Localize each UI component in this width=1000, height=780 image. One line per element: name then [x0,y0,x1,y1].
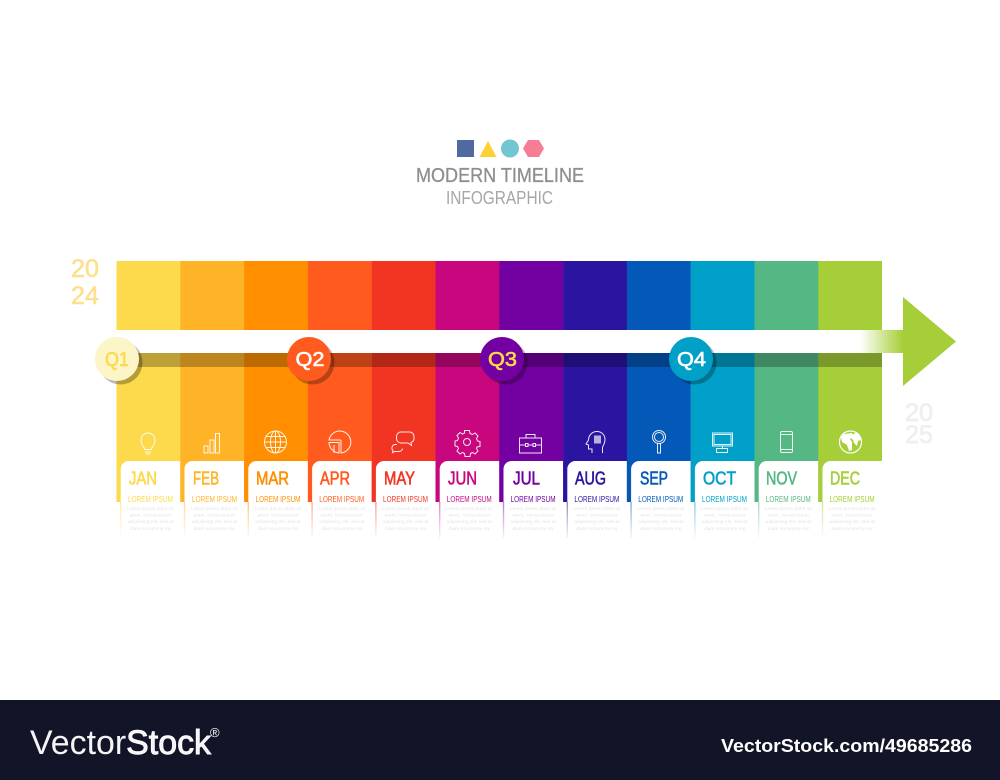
body text: Lorem ipsum dolor sit [701,506,749,512]
body text: adipiscing elit, sed at [128,519,174,525]
body text: Lorem ipsum dolor sit [574,506,621,512]
month: OCT: OCT [703,468,736,488]
body text: Lorem ipsum dolor sit [318,506,366,512]
body text: diam nonummy my [704,526,746,532]
label: lorem ipsum: LOREM IPSUM [256,495,300,504]
month: NOV: NOV [766,468,797,488]
icon: globe [264,431,286,453]
body text: adipiscing elit, sed at [829,519,875,525]
body text [127,506,175,532]
end year 2025 [905,399,933,449]
body text: amet, consectetuer [194,512,235,518]
body text: diam nonummy my [768,526,810,532]
label: lorem ipsum: LOREM IPSUM [766,495,811,504]
body text: adipiscing elit, sed at [574,519,620,525]
icon: pink hexagon [523,140,544,157]
column: January [116,261,180,532]
title block [416,140,584,208]
body text [191,506,238,532]
start year 2024: 24 [71,282,99,310]
body text: Lorem ipsum dolor sit [191,506,238,512]
body text: adipiscing elit, sed at [255,519,301,525]
end year 2025: 20 [905,399,933,427]
body text: diam nonummy my [194,526,236,532]
month: JUL: JUL [513,468,540,488]
body text: diam nonummy my [576,526,618,532]
body text: diam nonummy my [257,526,299,532]
body text: diam nonummy my [130,526,172,532]
month: SEP: SEP [640,468,668,488]
body text [318,506,366,532]
icon: teal circle [501,140,519,158]
month: MAR: MAR [256,468,289,488]
month: AUG: AUG [575,468,606,488]
body text: adipiscing elit, sed at [638,519,684,525]
body text: Lorem ipsum dolor sit [637,506,685,512]
start year 2024: 20 [71,255,99,283]
body text [701,506,749,532]
timeline shadow strip [116,353,882,367]
icon: smartphone [780,432,792,452]
body text: amet, consectetuer [385,512,427,518]
icon: head with document [586,432,605,453]
footer logo: VectorStock [30,724,212,762]
body text: diam nonummy my [831,526,873,532]
body text: Lorem ipsum dolor sit [382,506,430,512]
column: August [563,261,627,532]
body text: amet, consectetuer [768,512,809,518]
subheading: INFOGRAPHIC [446,187,553,208]
body text [829,506,876,532]
label: lorem ipsum: LOREM IPSUM [383,495,428,504]
footer bar [0,700,1000,780]
label: lorem ipsum: LOREM IPSUM [830,495,875,504]
month: JUN: JUN [448,468,477,488]
body text: adipiscing elit, sed at [510,519,556,525]
body text: adipiscing elit, sed at [383,519,429,525]
body text [765,506,812,532]
column: September [627,261,691,532]
body text: Lorem ipsum dolor sit [765,506,812,512]
marker: Q4: Q4 [677,349,706,371]
body text: diam nonummy my [321,526,363,532]
marker: Q4 [669,337,716,384]
body text: adipiscing elit, sed at [702,519,748,525]
body text [637,506,685,532]
body text: adipiscing elit, sed at [766,519,812,525]
body text: amet, consectetuer [130,512,172,518]
icon: speech bubbles [392,432,414,452]
month: DEC: DEC [830,468,860,488]
body text: Lorem ipsum dolor sit [829,506,876,512]
end year 2025: 25 [905,421,933,449]
month: FEB: FEB [193,468,219,488]
body text: adipiscing elit, sed at [447,519,493,525]
icon: pie chart [329,431,351,453]
body text: amet, consectetuer [831,512,873,518]
label: lorem ipsum: LOREM IPSUM [192,495,237,504]
body text: amet, consectetuer [257,512,299,518]
icon: magnifying glass [652,430,666,453]
column: October [691,261,755,532]
body text: diam nonummy my [385,526,427,532]
body text: amet, consectetuer [512,512,554,518]
label: lorem ipsum: LOREM IPSUM [574,495,619,504]
body text: amet, consectetuer [640,512,682,518]
icon: blue square [457,140,474,157]
column: March [244,261,308,532]
marker: Q2 [287,337,334,384]
body text: adipiscing elit, sed at [192,519,238,525]
column: February [180,261,244,532]
body text: amet, consectetuer [321,512,363,518]
column: July [499,261,563,532]
label: lorem ipsum: LOREM IPSUM [447,495,492,504]
marker: Q3: Q3 [488,349,517,371]
marker: Q2: Q2 [296,349,324,371]
body text [255,506,302,532]
month: APR: APR [320,468,350,488]
footer image id: VectorStock.com/49685286 [721,735,972,756]
marker: Q1: Q1 [105,349,129,371]
marker: Q1 [95,337,142,384]
heading: MODERN TIMELINE [416,164,584,187]
icon: gear [455,430,480,456]
body text: amet, consectetuer [704,512,746,518]
body text: diam nonummy my [512,526,554,532]
column: November [754,261,818,532]
body text: diam nonummy my [449,526,491,532]
body text: diam nonummy my [640,526,682,532]
body text: Lorem ipsum dolor sit [510,506,557,512]
label: lorem ipsum: LOREM IPSUM [638,495,683,504]
icon: briefcase [520,434,542,453]
icon: light bulb [141,433,155,454]
body text [382,506,430,532]
icon: yellow triangle [480,141,496,157]
body text: adipiscing elit, sed at [319,519,365,525]
body text [446,506,493,532]
label: lorem ipsum: LOREM IPSUM [511,495,556,504]
body text: Lorem ipsum dolor sit [446,506,493,512]
icon: bar chart [204,434,220,453]
month: JAN: JAN [129,468,157,488]
start year 2024 [71,255,99,310]
registered mark: ® [210,725,220,740]
body text: amet, consectetuer [576,512,618,518]
icon: world map globe [840,431,862,453]
marker: Q3 [480,337,528,384]
timeline arrow [860,297,956,386]
month: MAY: MAY [384,468,415,488]
body text [574,506,621,532]
body text: Lorem ipsum dolor sit [255,506,302,512]
column: May [372,261,436,532]
body text: Lorem ipsum dolor sit [127,506,175,512]
body text: amet, consectetuer [449,512,490,518]
body text [510,506,557,532]
label: lorem ipsum: LOREM IPSUM [128,495,173,504]
column: December [818,261,882,532]
label: lorem ipsum: LOREM IPSUM [319,495,364,504]
label: lorem ipsum: LOREM IPSUM [702,495,747,504]
column: June [436,261,500,532]
icon: desktop computer [712,433,732,452]
column: April [308,261,372,532]
